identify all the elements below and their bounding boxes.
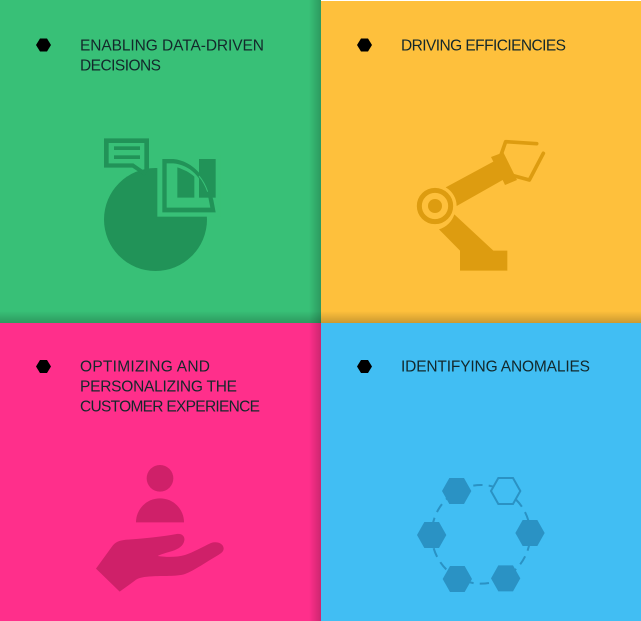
heading: optimizing and personalizing [80,358,260,416]
panel: optimizing and personalizing the customer experience [0,323,321,621]
heading: optimizing and personalizing: OPTIMIZING AND [80,358,210,376]
bullet: yellow panel [357,38,372,52]
icon: hexagon ring with one outlined hexagon [417,478,545,592]
heading: identifying anomalies: IDENTIFYING ANOMALIES [401,358,590,376]
heading: optimizing and personalizing: PERSONALIZING THE [80,378,237,396]
panel: enabling data-driven decisions [0,0,321,323]
panel: identifying anomalies [321,323,641,621]
heading: enabling data-driven decisions: ENABLING DATA-DRIVEN [80,38,264,54]
heading: enabling data-driven decisions [80,38,264,74]
icon: robot arm [419,142,543,271]
heading: driving efficiencies: DRIVING EFFICIENCIES [401,38,566,54]
heading: enabling data-driven decisions: DECISIONS [80,58,161,74]
heading: optimizing and personalizing: CUSTOMER EXPERIENCE [80,398,260,416]
icon: hand holding person [96,465,224,592]
icon: pie chart with speech bubble and bar chart [104,138,221,271]
bullet: pink panel [36,360,51,373]
bullet: blue panel [357,360,372,373]
bullet: green panel [36,38,51,52]
panel: driving efficiencies [321,1,641,323]
